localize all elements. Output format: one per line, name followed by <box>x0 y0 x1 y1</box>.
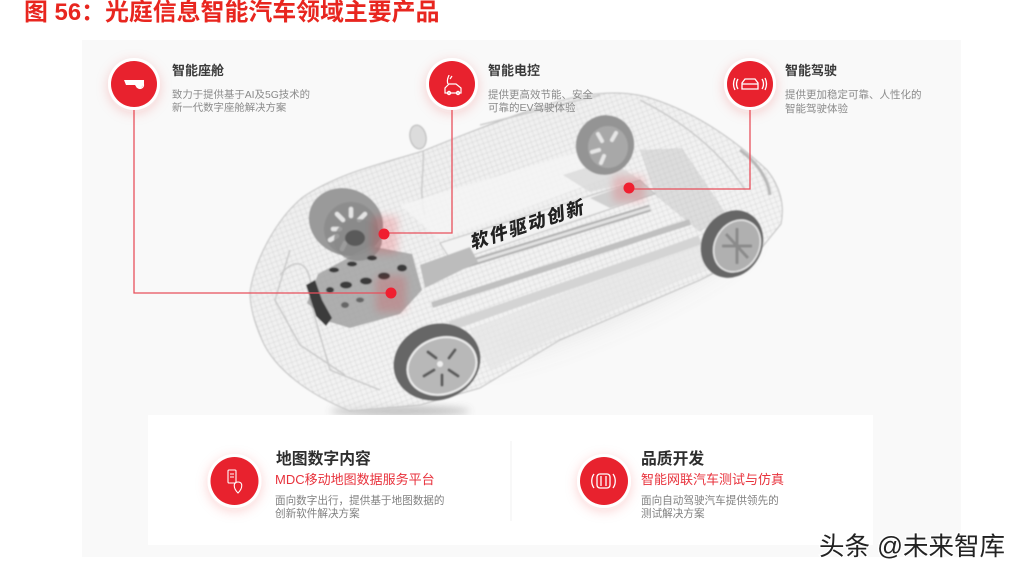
description: 智能驾驶体验 <box>785 102 848 115</box>
hotspot dots <box>378 182 634 298</box>
feature: smart driving <box>724 58 922 115</box>
icon: cockpit <box>108 58 160 110</box>
wheel: rear far <box>566 106 644 184</box>
product: quality development <box>577 449 784 520</box>
background panel <box>82 40 961 557</box>
wheel: rear near <box>689 199 775 289</box>
heading: 智能电控 <box>488 63 540 78</box>
rear structure <box>640 148 725 232</box>
heading: 智能驾驶 <box>785 63 837 78</box>
icon: map <box>208 454 262 508</box>
description: 可靠的EV驾驶体验 <box>488 101 576 114</box>
floor pan <box>400 150 615 240</box>
icon: driving sensors <box>724 58 776 110</box>
description: 面向数字出行，提供基于地图数据的 <box>275 494 444 507</box>
car body wireframe <box>250 93 782 411</box>
description: 测试解决方案 <box>641 507 705 520</box>
chassis label: 软件驱动创新 <box>467 197 588 253</box>
panel: bottom products <box>148 415 873 545</box>
description: 创新软件解决方案 <box>275 507 360 520</box>
description: 提供更加稳定可靠、人性化的 <box>785 88 922 101</box>
product: map digital content <box>208 449 444 520</box>
leader lines <box>134 106 750 293</box>
watermark: 头条 @未来智库 <box>819 533 1005 561</box>
description: 新一代数字座舱解决方案 <box>172 101 287 114</box>
wheel: front far <box>298 176 394 268</box>
heading: 品质开发 <box>641 449 704 468</box>
subheading: 智能网联汽车测试与仿真 <box>641 472 784 487</box>
car illustration <box>250 93 782 416</box>
description: 提供更高效节能、安全 <box>488 88 593 101</box>
ground shadow <box>330 214 756 416</box>
body contours <box>275 95 770 390</box>
feature: smart electric control <box>426 58 593 114</box>
chassis strip <box>440 180 655 262</box>
description: 致力于提供基于AI及5G技术的 <box>172 88 310 101</box>
red highlights <box>372 176 645 312</box>
engine <box>306 219 478 328</box>
subheading: MDC移动地图数据服务平台 <box>275 472 435 487</box>
icon: electric car <box>426 58 478 110</box>
heading: 地图数字内容 <box>276 449 371 468</box>
wheel: front near <box>383 312 491 412</box>
heading: 智能座舱 <box>172 63 224 78</box>
mirror <box>408 124 428 150</box>
feature: smart cockpit <box>108 58 310 114</box>
icon: car test <box>577 454 631 508</box>
description: 面向自动驾驶汽车提供领先的 <box>641 494 779 507</box>
drive shafts <box>425 208 700 326</box>
